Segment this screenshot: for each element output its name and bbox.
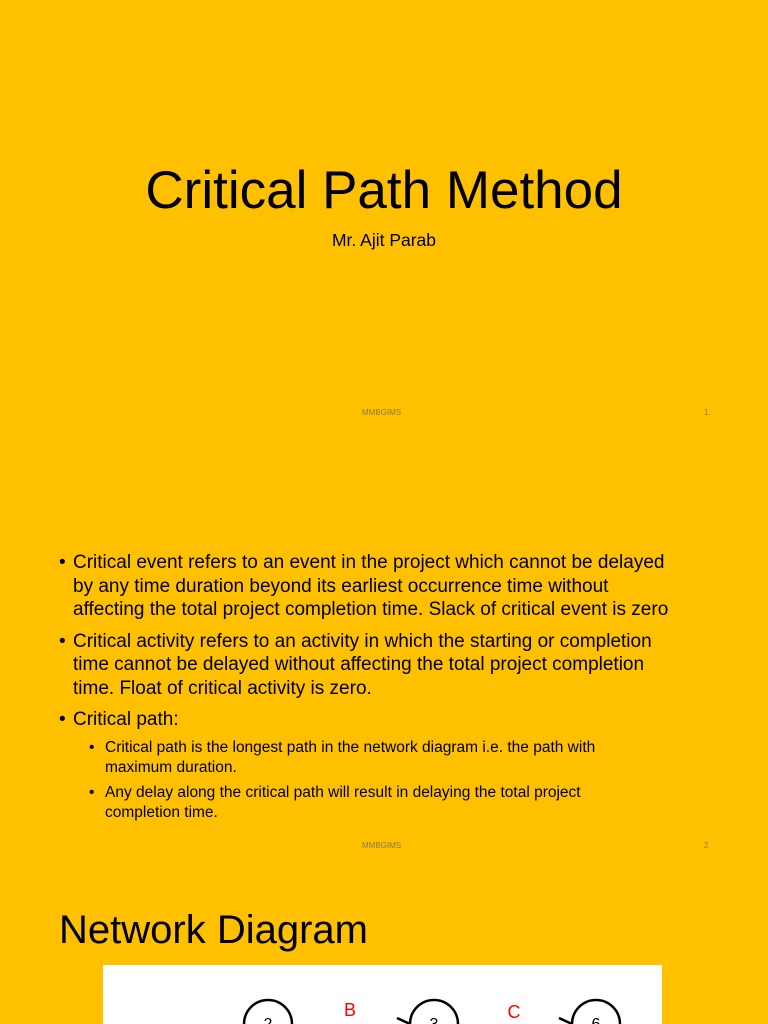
title: Critical Path Method [145,161,623,220]
footer slide 1: MMBGIMS [362,408,401,417]
arrowheads [397,1018,572,1024]
subtitle: Mr. Ajit Parab [332,230,436,250]
bullet list: Critical path: [73,709,179,730]
network diagram panel [103,965,662,1024]
bullet list: Critical event refers to an event in the project which cannot be delayed by any time duration beyond its earliest occurrence time without affecting the total project completion time. Slack of critical event is zero [73,552,668,620]
node 3 [410,1000,458,1024]
footer slide 2: MMBGIMS [362,841,401,850]
page number 2: 2 [704,841,708,850]
page number 1: 1 [704,408,708,417]
bullet list: Any delay along the critical path will result in delaying the total project completion time. [105,784,581,821]
bullet list: Critical path is the longest path in the network diagram i.e. the path with maximum duration. [105,738,595,776]
label B: B [344,1000,356,1020]
node 6 [572,1000,620,1024]
bullet list [60,552,668,821]
bullet list: Critical activity refers to an activity in which the starting or completion time cannot be delayed without affecting the total project completion time. Float of critical activity is zero. [73,630,652,698]
heading: network diagram: Network Diagram [59,908,368,952]
label C: C [508,1002,520,1022]
node 2 [244,1000,292,1024]
